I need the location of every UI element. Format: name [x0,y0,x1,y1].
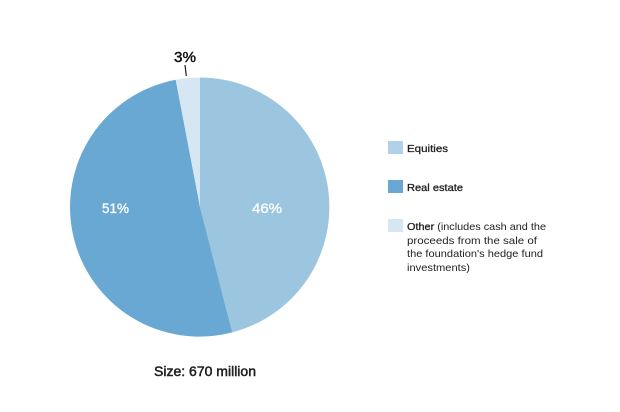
pie chart [70,50,329,337]
legend item: equities: Equities [407,143,448,155]
slice: equities 46% [200,78,329,332]
legend item: other [388,219,546,274]
legend item: other: the foundation's hedge fund [407,248,543,260]
legend item: equities [388,141,448,155]
label: 51%: 51% [102,201,129,216]
slice: other 3% [176,78,200,207]
label: 46%: 46% [252,201,282,216]
legend item: other: proceeds from the sale of [407,235,537,247]
legend item: real estate [388,180,463,194]
caption: size: Size: 670 million [154,364,256,379]
legend item: other: Other (includes cash and the [407,221,546,233]
leader line for 3% [185,65,186,76]
label: 3%: 3% [174,50,196,66]
legend [388,141,546,274]
legend item: real estate: Real estate [407,182,463,194]
legend item: other: investments) [407,262,470,274]
slice: real estate 51% [70,80,232,337]
